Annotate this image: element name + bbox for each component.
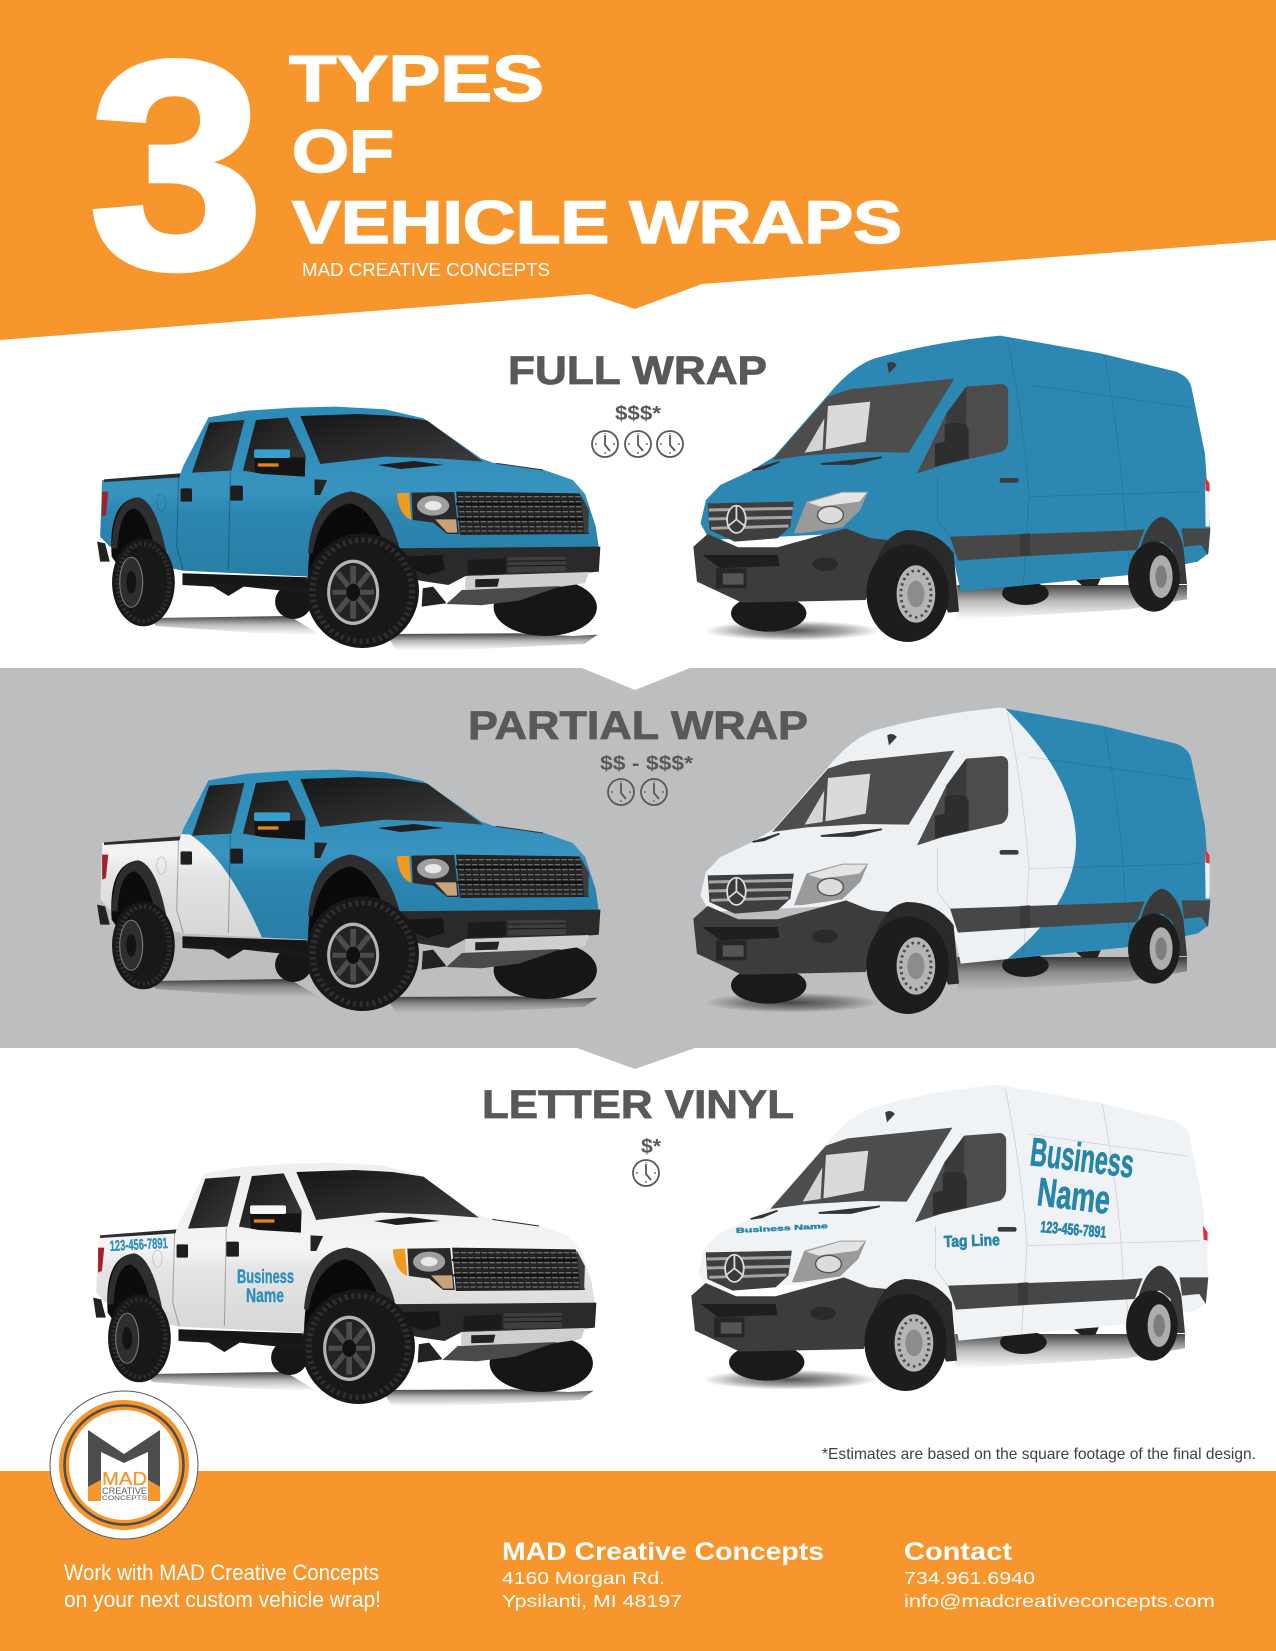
van lettering: Name [1035,1170,1113,1223]
truck: letter vinyl [93,1163,596,1407]
logo M mark [88,1430,160,1487]
van: full wrap [693,336,1210,642]
logo badge [50,1391,198,1539]
heading: partial wrap: PARTIAL WRAP [468,704,808,748]
van lettering: Business Name [736,1223,828,1235]
footer address: Ypsilanti, MI 48197 [502,1591,682,1611]
footer tagline: Work with MAD Creative Concepts [64,1560,379,1585]
footer address [502,1538,824,1611]
price: partial wrap: $$ - $$$* [600,753,693,775]
footer contact [904,1538,1215,1611]
time icon: letter vinyl [633,1160,659,1186]
price: letter vinyl: $* [641,1136,661,1158]
heading: letter vinyl: LETTER VINYL [482,1083,794,1127]
title line VEHICLE WRAPS: VEHICLE WRAPS [292,189,902,256]
title line OF: OF [292,118,394,185]
time icons: full wrap [592,431,683,457]
price: full wrap: $$$* [615,403,661,425]
truck: full wrap [97,407,600,651]
time icons: partial wrap [608,779,667,805]
truck lettering: Name [246,1286,284,1307]
van lettering: Tag Line [944,1232,1000,1251]
van: partial wrap [693,705,1226,1014]
footnote: *Estimates are based on the square footage of the final design. [822,1446,1256,1463]
footer tagline [64,1560,381,1612]
truck lettering: 123-456-7891 [109,1235,168,1255]
subtitle: MAD CREATIVE CONCEPTS [302,260,550,280]
footer address: MAD Creative Concepts [502,1538,824,1566]
header banner [0,0,1276,340]
logo wordmark: MAD [102,1469,147,1489]
truck: partial wrap [94,770,600,1014]
footer band [0,1471,1276,1651]
truck lettering: Business [237,1267,294,1288]
title [89,0,902,330]
logo badge: CREATIVE [102,1486,147,1496]
van: letter vinyl [691,1085,1208,1391]
footer contact: info@madcreativeconcepts.com [904,1591,1215,1611]
footer address: 4160 Morgan Rd. [502,1568,665,1588]
van lettering: Business [1028,1130,1136,1187]
footer tagline: on your next custom vehicle wrap! [64,1587,381,1612]
footer contact: Contact [904,1538,1013,1566]
big number 3: 3 [89,0,264,330]
logo badge: CONCEPTS [102,1496,147,1502]
truck lettering [109,1235,294,1307]
van lettering: 123-456-7891 [1040,1219,1107,1242]
panel: partial wrap grey band [0,668,1276,1069]
heading: full wrap: FULL WRAP [508,349,767,393]
title line TYPES: TYPES [289,42,544,115]
van lettering [736,1130,1136,1251]
footer contact: 734.961.6940 [904,1568,1035,1588]
